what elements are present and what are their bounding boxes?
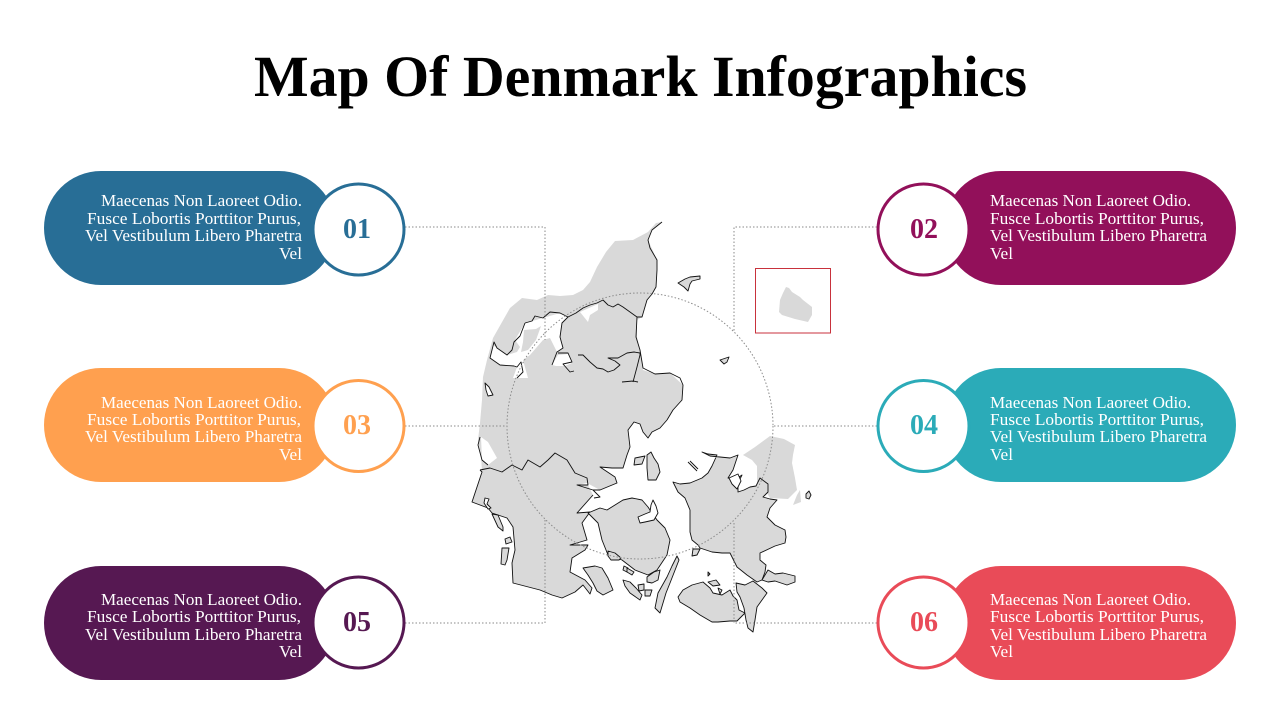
- inset island: [779, 287, 812, 322]
- Als island: [583, 566, 613, 595]
- text 06: Vel: [990, 642, 1013, 661]
- text 05: [85, 590, 303, 661]
- badge 04: 04: [910, 410, 938, 441]
- map of Denmark: [472, 222, 811, 632]
- Wadden island Fano: [492, 514, 503, 531]
- Zealand south islet: [692, 549, 700, 556]
- South Fyn islet chain: [608, 551, 621, 560]
- Ven sliver: [793, 490, 801, 505]
- text 05: Vel: [279, 642, 302, 661]
- text 06: Vel Vestibulum Libero Pharetra: [990, 625, 1208, 644]
- text 03: Vel Vestibulum Libero Pharetra: [85, 427, 303, 446]
- text 01: [85, 191, 303, 263]
- text 02: Vel: [990, 244, 1013, 263]
- text 02: Maecenas Non Laoreet Odio.: [990, 191, 1191, 210]
- panel 01: [44, 171, 404, 285]
- badge 03: 03: [343, 410, 371, 441]
- South Fyn islet: [645, 590, 652, 596]
- badge 03: [313, 380, 404, 472]
- Mon island: [762, 570, 795, 585]
- text 06: Fusce Lobortis Porttitor Purus,: [990, 607, 1204, 626]
- badge 06: [878, 577, 969, 668]
- Limfjord island: [521, 326, 541, 352]
- text 04: Vel Vestibulum Libero Pharetra: [990, 427, 1208, 446]
- panel 05: [44, 566, 404, 680]
- Wadden island Romo: [484, 498, 491, 509]
- text 02: [990, 191, 1208, 263]
- text 01: Maecenas Non Laoreet Odio.: [101, 191, 302, 210]
- Falster island: [736, 581, 767, 632]
- connector 04: [773, 425, 877, 427]
- Endelave island: [634, 456, 645, 465]
- Sejero sliver: [688, 461, 698, 471]
- Zealand inner fjord water: [729, 474, 741, 489]
- text 05: Maecenas Non Laoreet Odio.: [101, 590, 302, 609]
- connector 01: [405, 227, 545, 340]
- Wadden island Manno: [501, 548, 509, 565]
- title: Map Of Denmark Infographics: [254, 44, 1027, 109]
- connector: circle ring: [507, 293, 773, 559]
- text 04: Fusce Lobortis Porttitor Purus,: [990, 410, 1204, 429]
- text 04: Maecenas Non Laoreet Odio.: [990, 393, 1191, 412]
- text 03: Fusce Lobortis Porttitor Purus,: [87, 410, 301, 429]
- text 04: [990, 393, 1208, 464]
- badge 01: [313, 184, 404, 275]
- badge 05: [313, 577, 404, 668]
- Laeso island: [678, 276, 700, 291]
- connector 06: [734, 521, 877, 623]
- text 04: Vel: [990, 445, 1013, 464]
- text 02: Fusce Lobortis Porttitor Purus,: [990, 209, 1204, 228]
- badge 04: [878, 380, 969, 472]
- Jutland landmass: [472, 222, 683, 598]
- Zealand island: [673, 452, 786, 582]
- connector 05: [405, 519, 545, 623]
- panel 02: [878, 171, 1236, 285]
- Holmsland water: [485, 383, 493, 396]
- Fyn northeast bay: [638, 500, 658, 523]
- Zealand north unstroked land: [743, 436, 797, 499]
- Nissum Fjord water: [481, 437, 497, 465]
- Mariager Fjord water: [552, 354, 572, 366]
- text 03: Vel: [279, 445, 302, 464]
- South Fyn islet: [638, 584, 644, 591]
- panel 06: [878, 566, 1236, 680]
- connector 02: [734, 227, 877, 332]
- Aero island: [623, 580, 642, 600]
- Wadden islet: [505, 537, 512, 544]
- badge 05: 05: [343, 607, 371, 638]
- text 01: Vel Vestibulum Libero Pharetra: [85, 226, 303, 245]
- Limfjord water: [490, 313, 568, 378]
- text 05: Vel Vestibulum Libero Pharetra: [85, 625, 303, 644]
- Lolland island: [678, 582, 745, 622]
- text 05: Fusce Lobortis Porttitor Purus,: [87, 607, 301, 626]
- panel 03: [44, 368, 404, 482]
- badge 06: 06: [910, 607, 938, 638]
- Lolland north islet: [718, 588, 722, 594]
- inset map box: [756, 268, 830, 333]
- text 02: Vel Vestibulum Libero Pharetra: [990, 226, 1208, 245]
- connector 03: [405, 425, 507, 427]
- Lolland north islet: [708, 572, 710, 576]
- badge 02: [878, 184, 969, 275]
- panel 04: [878, 368, 1236, 482]
- text 06: [990, 590, 1208, 661]
- Lolland north islet: [708, 580, 720, 586]
- badge 01: 01: [343, 214, 371, 245]
- South Fyn islet: [623, 566, 628, 572]
- Fyn island: [588, 498, 670, 575]
- text 03: [85, 393, 303, 464]
- text 01: Vel: [279, 244, 302, 263]
- text 06: Maecenas Non Laoreet Odio.: [990, 590, 1191, 609]
- Jutland coast strokes: [525, 222, 662, 323]
- badge 02: 02: [910, 214, 938, 245]
- Samso island: [647, 452, 660, 480]
- Bornholm-side islet: [806, 491, 811, 499]
- Langeland island: [655, 556, 679, 613]
- Anholt island: [720, 357, 729, 364]
- text 03: Maecenas Non Laoreet Odio.: [101, 393, 302, 412]
- Taasinge island: [647, 570, 660, 583]
- South Fyn islet: [627, 568, 634, 575]
- text 01: Fusce Lobortis Porttitor Purus,: [87, 209, 301, 228]
- North Jutland bay water: [580, 304, 598, 322]
